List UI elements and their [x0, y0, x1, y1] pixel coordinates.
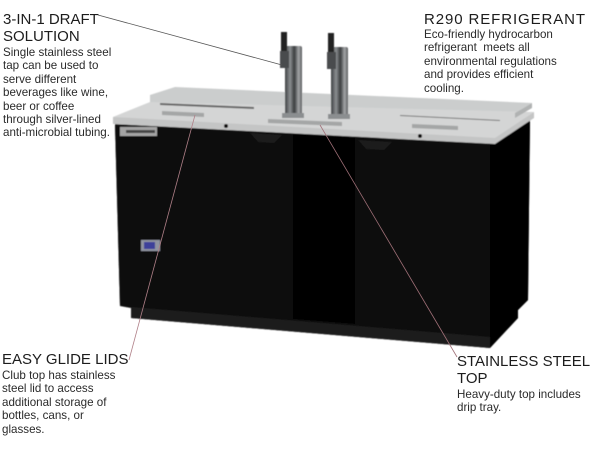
description: refrigerant: environmental regulations	[424, 55, 557, 68]
description: draft solution: beer or coffee	[3, 100, 74, 113]
heading: stainless steel top	[457, 353, 590, 387]
nameplate	[120, 127, 157, 136]
description: draft solution: tap can be used to	[3, 59, 98, 72]
control display	[141, 240, 160, 251]
leader line: stainless steel top	[320, 125, 457, 357]
callout: easy glide lids	[2, 351, 128, 436]
description: refrigerant: cooling.	[424, 82, 464, 95]
description: draft solution: anti-microbial tubing.	[3, 126, 110, 139]
description: refrigerant: and provides efficient	[424, 68, 533, 81]
heading: 3-in-1 draft solution: 3-IN-1 DRAFT	[3, 11, 99, 28]
heading: R290 refrigerant: R290 REFRIGERANT	[424, 11, 586, 28]
cabinet body	[115, 118, 530, 348]
description: easy glide lids: steel lid to access	[2, 382, 94, 395]
leader line: easy glide lids	[129, 115, 195, 360]
heading: 3-in-1 draft solution: SOLUTION	[3, 28, 80, 45]
description: draft solution: through silver-lined	[3, 113, 101, 126]
description: refrigerant: refrigerant meets all	[424, 41, 530, 54]
draft tower left	[280, 32, 304, 118]
draft tower right	[327, 33, 350, 119]
description: easy glide lids: glasses.	[2, 423, 45, 436]
callout: stainless steel top	[457, 353, 590, 414]
description: easy glide lids: Club top has stainless	[2, 369, 115, 382]
description: draft solution	[3, 46, 111, 139]
description: stainless steel top: drip tray.	[457, 401, 501, 414]
leader line: 3-in-1 draft solution	[98, 15, 282, 65]
heading: easy glide lids: EASY GLIDE LIDS	[2, 351, 128, 368]
description: draft solution: Single stainless steel	[3, 46, 111, 59]
heading: stainless steel top: TOP	[457, 370, 488, 387]
heading: stainless steel top: STAINLESS STEEL	[457, 353, 590, 370]
description: stainless steel top: Heavy-duty top includes	[457, 388, 581, 401]
callout: R290 refrigerant	[424, 11, 586, 95]
description: easy glide lids: bottles, cans, or	[2, 409, 84, 422]
description: stainless steel top	[457, 388, 581, 414]
description: refrigerant: Eco-friendly hydrocarbon	[424, 28, 553, 41]
callout: 3-in-1 draft solution	[3, 11, 111, 139]
description: draft solution: serve different	[3, 73, 76, 86]
stainless steel top	[113, 87, 534, 144]
description: refrigerant	[424, 28, 557, 95]
description: draft solution: beverages like wine,	[3, 86, 108, 99]
description: easy glide lids	[2, 369, 115, 436]
description: easy glide lids: additional storage of	[2, 396, 106, 409]
heading: 3-in-1 draft solution	[3, 11, 99, 45]
